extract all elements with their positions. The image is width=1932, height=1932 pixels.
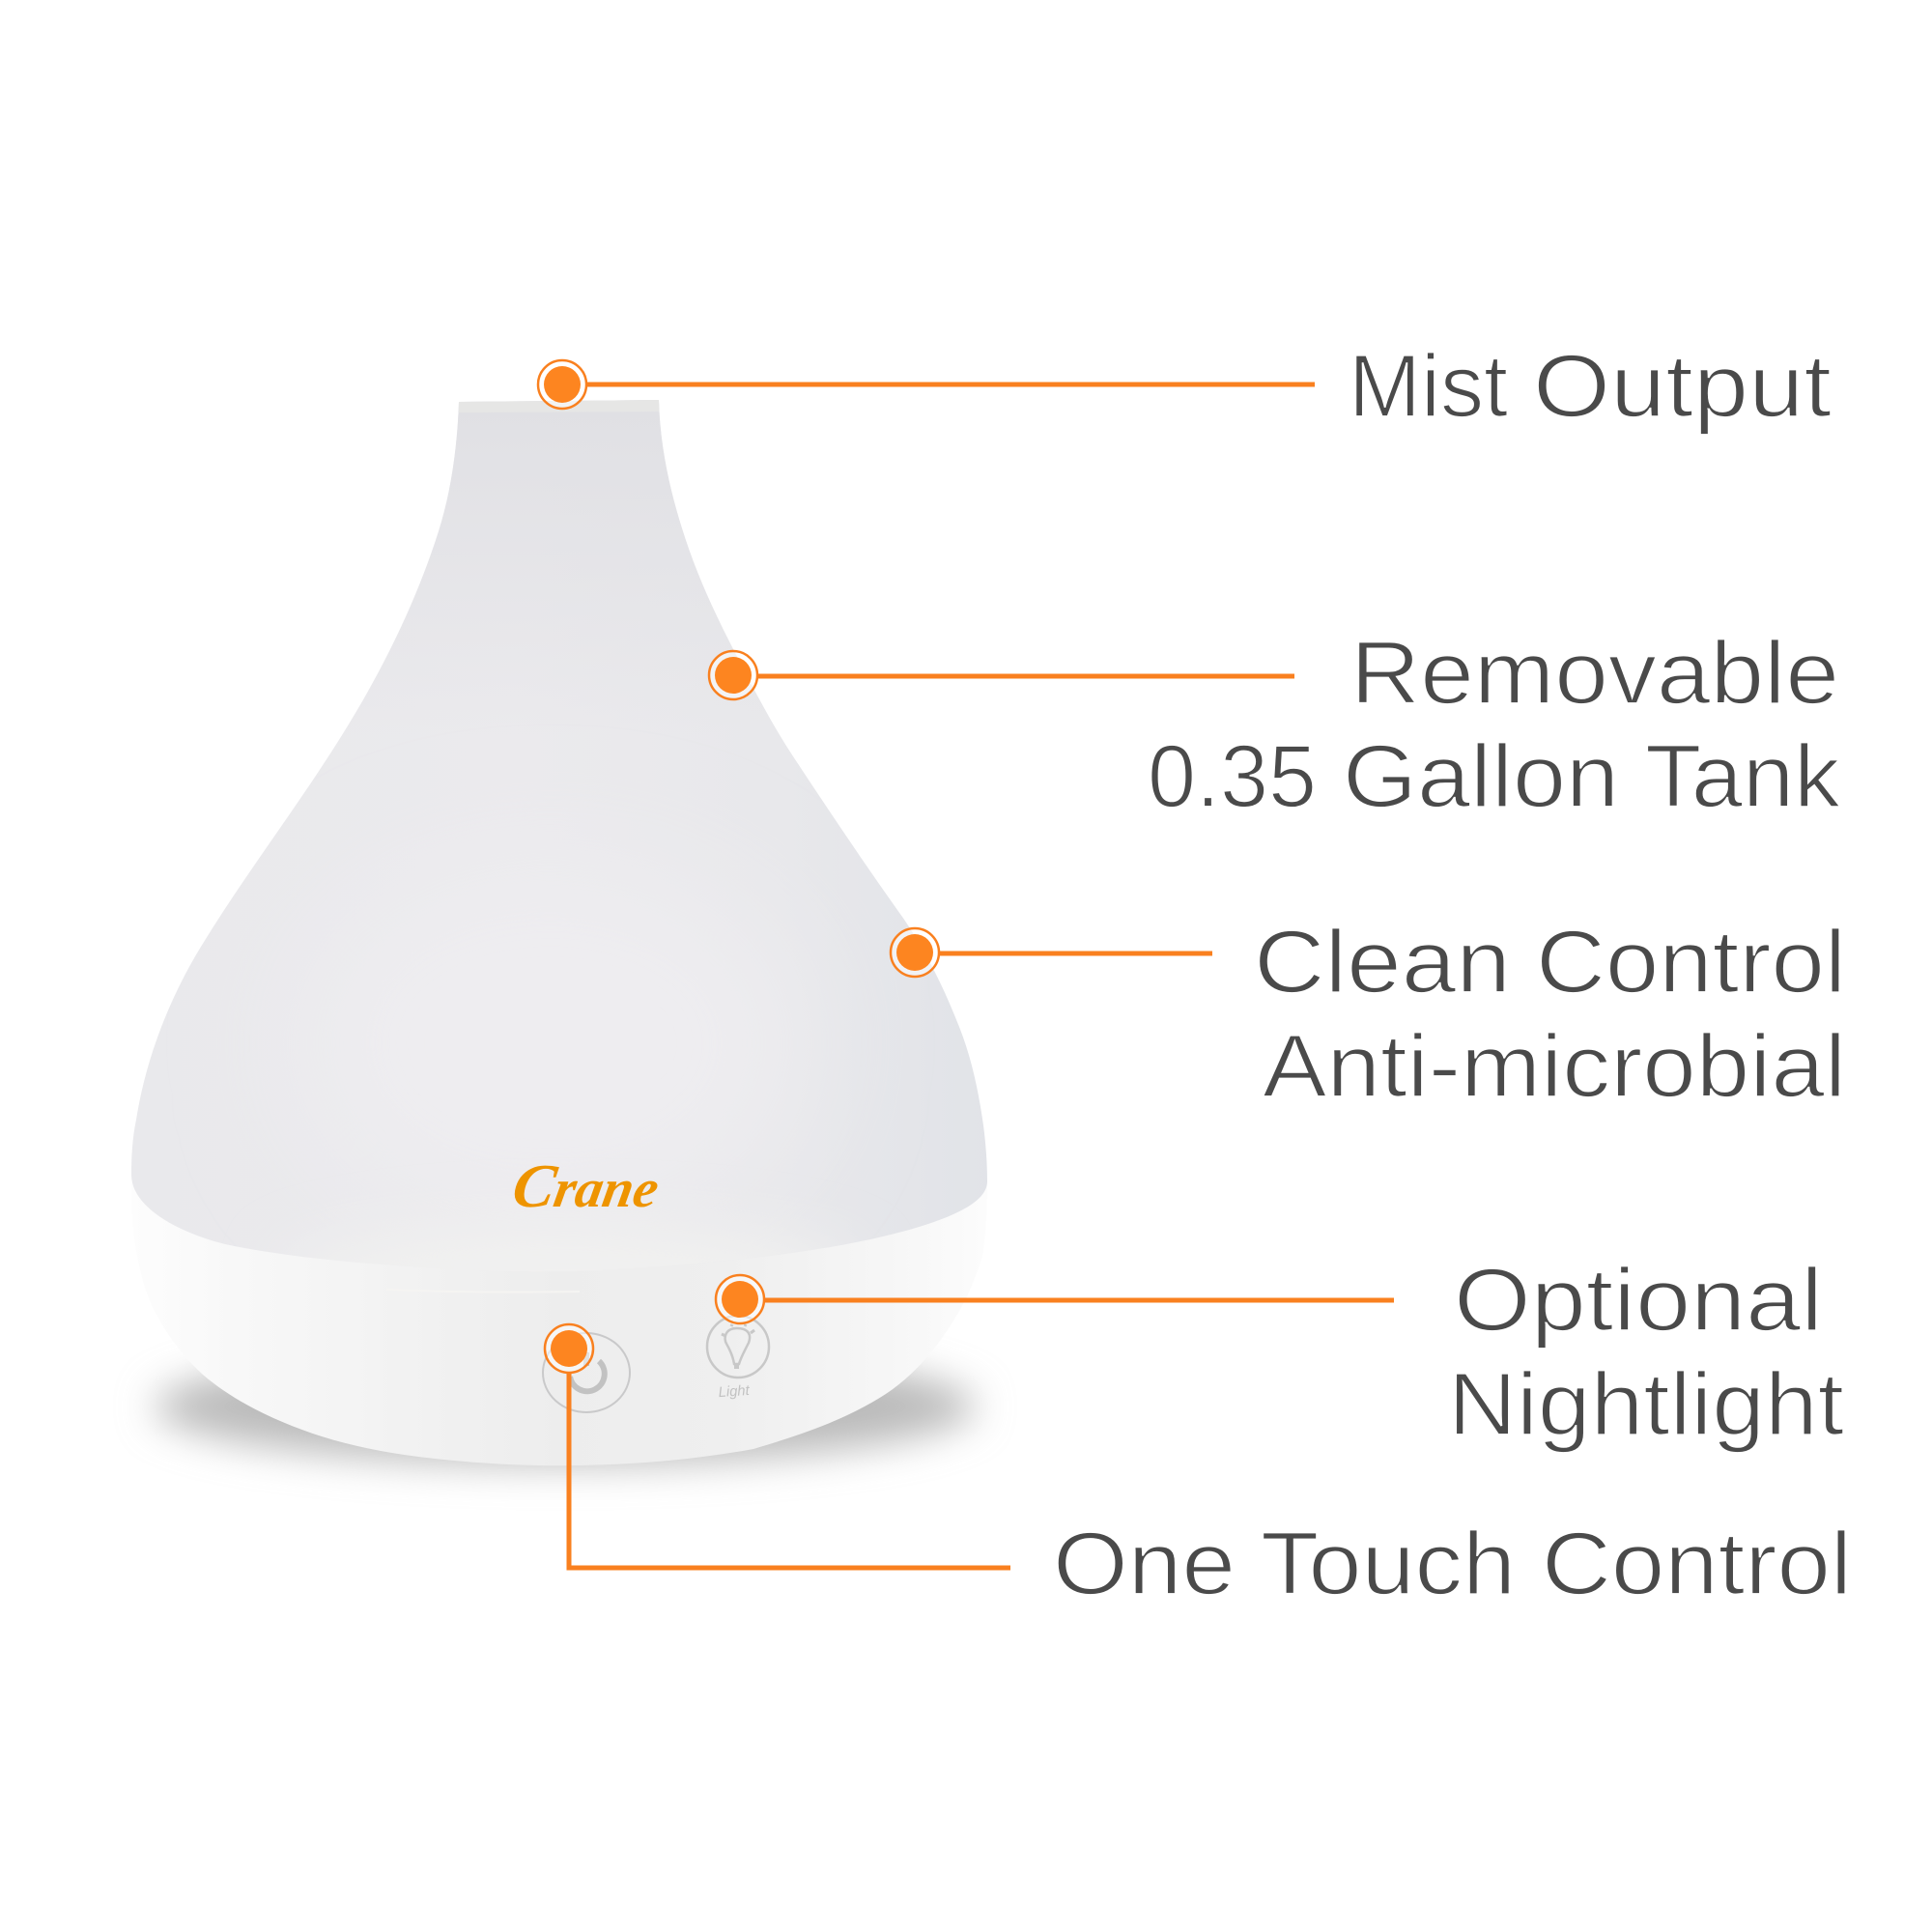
water tank	[126, 396, 995, 1323]
brand logo: Crane	[508, 1151, 665, 1220]
callout: one touch control: One	[1053, 1515, 1236, 1613]
light button label: Light	[718, 1382, 751, 1401]
base seam highlight	[386, 1290, 580, 1293]
callout: clean control	[891, 913, 1846, 1116]
callout: one touch control	[545, 1324, 1852, 1613]
callout: clean control: Clean	[1254, 913, 1511, 1011]
humidifier product	[126, 396, 995, 1465]
callout: one touch control: Control	[1542, 1515, 1852, 1613]
callout: mist output: Mist	[1349, 337, 1508, 436]
callout: mist output: Output	[1533, 337, 1832, 436]
power button icon	[543, 1333, 630, 1412]
humidifier infographic	[131, 353, 1845, 1594]
base	[131, 1183, 987, 1465]
callout: removable tank: Tank	[1645, 727, 1841, 826]
callout: clean control: Anti-microbial	[1263, 1017, 1846, 1116]
callout: one touch control: Touch	[1261, 1515, 1516, 1613]
callout: removable tank: Removable	[1350, 624, 1839, 723]
tank rim	[459, 400, 660, 412]
callout: removable tank: Gallon	[1343, 727, 1619, 826]
product shadow	[155, 1349, 976, 1464]
callout: mist output	[538, 337, 1832, 436]
callout: nightlight	[716, 1251, 1844, 1454]
callout: nightlight: Nightlight	[1448, 1355, 1844, 1454]
callout: removable tank: 0.35	[1148, 727, 1317, 826]
callout: clean control: Control	[1536, 913, 1846, 1011]
light button icon	[707, 1316, 769, 1378]
callout: removable tank	[709, 624, 1841, 826]
callout: nightlight: Optional	[1454, 1251, 1823, 1350]
